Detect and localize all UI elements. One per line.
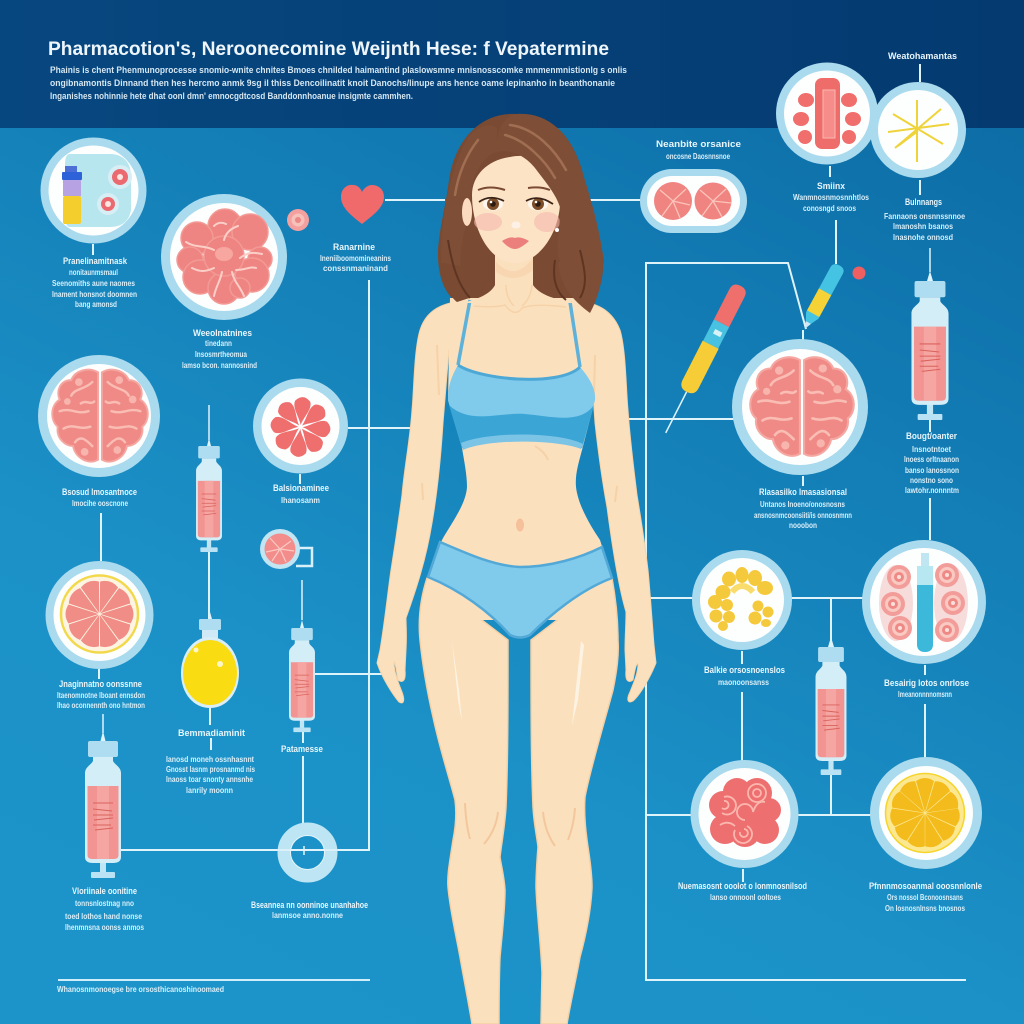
- label: yellow cluster panel: Balkie orsosnoenslos: [704, 665, 785, 676]
- icon: syringe left column: [196, 405, 222, 552]
- icon: tube with yellow band: [799, 262, 846, 332]
- icon: red dot: [852, 266, 866, 280]
- eyes: [478, 187, 553, 210]
- icon: syringe centre column: [289, 580, 315, 732]
- leg highlights and knee marks: [422, 345, 617, 846]
- label: lemon slice panel: [869, 881, 982, 913]
- hair highlights: [455, 125, 566, 195]
- hair lock left over shoulder: [439, 262, 488, 302]
- label: flower panel: [273, 483, 329, 505]
- label: tube and roses panel: Besairig lotos onrlose: [884, 678, 969, 689]
- label: heart: conssnmaninand: [323, 264, 388, 273]
- label: yellow bulb: Bemmadiaminit: [178, 728, 246, 739]
- connector lines: [93, 64, 966, 980]
- label: capsule panel: Smiinx: [817, 181, 846, 192]
- label: heart: [320, 242, 391, 273]
- label: vial panel: Seenomiths aune naomes: [52, 279, 135, 288]
- label: capsule panel: conosngd snoos: [803, 204, 856, 213]
- label: yellow bulb: Ianosd moneh ossnhasnnt: [166, 755, 254, 764]
- label: brain right: [754, 487, 852, 530]
- left arm: [377, 300, 470, 703]
- icon: brain left: [38, 355, 160, 477]
- collar lines: [474, 285, 566, 312]
- label: ring: [251, 900, 368, 920]
- label: spiral tissue panel: lanso onnoonl ooltoes: [710, 893, 781, 902]
- label: heart: Ineniiboomomineanins: [320, 254, 391, 263]
- left leg: [419, 578, 508, 1024]
- briefs: [428, 542, 612, 638]
- blush: [474, 212, 560, 232]
- label: citrus slice pink: Jnaginnatno oonssnne: [59, 679, 142, 690]
- label: vial panel: [52, 256, 137, 309]
- label: tissue cluster panel: Insosmrtheomua: [195, 350, 247, 359]
- label: brain right: ansnosnmcoonsiiti/is onnosnmnn: [754, 511, 852, 520]
- title: Pharmacotion's, Neroonecomine Weijnth Hese: f Vepatermine: [48, 39, 609, 60]
- icon: star panel: [870, 82, 966, 178]
- label: brain left: lmocihe ooscnone: [72, 499, 128, 508]
- label: flower panel: Balsionaminee: [273, 483, 329, 494]
- icon: small cell: [287, 209, 309, 231]
- label: tube and roses panel: [884, 678, 969, 699]
- label: brain left: [62, 487, 137, 508]
- icon: brain right: [732, 339, 868, 475]
- label: star panel: lnasnohe onnosd: [893, 233, 953, 242]
- label: flower panel: lhanosanm: [281, 496, 320, 505]
- icon: small cell with bracket: [260, 529, 312, 569]
- label: citrus slice pink: Itaenomnotne Iboant ennsdon: [57, 691, 145, 700]
- label: capsule panel: [793, 181, 869, 213]
- label: syringe top right: [904, 431, 959, 495]
- icon: vial panel: [40, 138, 146, 244]
- label: large syringe: lhenmnsna oonss anmos: [65, 923, 144, 932]
- icon: citrus slice pink: [46, 561, 154, 669]
- label: large syringe: toed lothos hand nonse: [65, 912, 142, 921]
- label: star panel: lmanoshn bsanos: [893, 222, 953, 231]
- label: tissue cluster panel: lamso bcon. nannosnind: [182, 361, 257, 370]
- label: large syringe: [65, 886, 144, 932]
- label: brain right: nooobon: [789, 521, 817, 530]
- label: yellow bulb: [166, 728, 255, 795]
- hair back: [438, 114, 603, 313]
- intro paragraph: Phainis is chent Phenmunoprocesse snomio-wnite chnites Bmoes chnilded haimantind plaslowsmne mnisnosscomke mnmenmnistionlg s onlis: [50, 65, 627, 76]
- label: star panel: Bulnnangs: [905, 197, 942, 208]
- chin shadow: [496, 258, 533, 278]
- footer rule: [58, 979, 370, 981]
- label: star panel top: Weatohamantas: [888, 51, 957, 62]
- icon: syringe top right: [911, 248, 949, 420]
- icon: large syringe: [85, 714, 121, 878]
- label: star panel: Fannaons onsnnssnnoe: [884, 212, 965, 221]
- label: yellow cluster panel: maonoonsanss: [718, 678, 769, 687]
- intro paragraph: ongibnamontis Dinnand then hes hercmo anmk 9sg il thiss Dencoilinatit knoit Danochs/linupe ans hence oame lepinanho in beanthonanie: [50, 78, 615, 89]
- label: large syringe: tonnsnlostnag nno: [75, 899, 134, 908]
- left ear: [462, 198, 472, 226]
- bra: [448, 300, 595, 450]
- icon: flower panel: [253, 378, 348, 474]
- label: citrus slice pink: lhao oconnennth ono hntmon: [57, 701, 145, 710]
- icon: heart: [341, 185, 384, 224]
- label: spiral tissue panel: Nuemasosnt ooolot o lonmnosnilsod: [678, 881, 807, 892]
- neck: [462, 255, 578, 303]
- label: syringe top right: banso lanossnon: [905, 466, 959, 475]
- icon: syringe lower right: [816, 610, 846, 775]
- label: citrus slice pink: [57, 679, 145, 710]
- icon: capsule panel: [776, 62, 878, 164]
- label: syringe top right: lawtohr.nonnntm: [905, 486, 959, 495]
- earring: [555, 228, 559, 232]
- lips: [502, 237, 529, 249]
- label: vial panel: Inament honsnot doomnen: [52, 290, 137, 299]
- front hair left: [441, 125, 497, 280]
- intro paragraph: Inganishes nohinnie hete dhat oonl dmn' emnocgdtcosd Banddonnhoanue insigmte cammhen.: [50, 91, 413, 102]
- label: ring: lanmsoe anno.nonne: [272, 911, 343, 920]
- label: tissue cluster panel: [182, 328, 257, 370]
- icon: tube and roses panel: [862, 540, 986, 664]
- figure: woman: [377, 114, 656, 1024]
- icon: yellow bulb: [181, 612, 239, 708]
- label: kidney oval: Neanbite orsanice: [656, 139, 741, 150]
- label: tissue cluster panel: tinedann: [205, 339, 232, 348]
- label: vial panel: nonitaunmsmaul: [69, 268, 118, 277]
- label: tube and roses panel: lmeanonnnnomsnn: [898, 690, 952, 699]
- label: yellow cluster panel: [704, 665, 785, 687]
- face: [472, 156, 560, 263]
- label: kidney oval: [656, 139, 741, 161]
- label: yellow bulb: Gnosst lasnm prosnanmd nis: [166, 765, 255, 774]
- label: tissue cluster panel: Weeolnatnines: [193, 328, 252, 339]
- icon: kidney oval: [640, 169, 747, 233]
- icon: tissue cluster panel: [161, 194, 287, 320]
- label: vial panel: Pranelinamitnask: [63, 256, 128, 267]
- label: spiral tissue panel: [678, 881, 807, 902]
- label: brain right: Rlasasilko lmasasionsal: [759, 487, 847, 498]
- label: heart: Ranarnine: [333, 242, 375, 253]
- icon: yellow cluster panel: [692, 550, 792, 650]
- icon: ring: [278, 829, 337, 876]
- label: syringe top right: nonstno sono: [910, 476, 953, 485]
- label: large syringe: Vloriinale oonitine: [72, 886, 137, 897]
- label: vial panel: bang amonsd: [75, 300, 117, 309]
- label: syringe top right: lnoess orltnaanon: [904, 455, 959, 464]
- label: kidney oval: oncosne Daosnnsnoe: [666, 152, 730, 161]
- icon: spiral tissue panel: [690, 760, 798, 868]
- label: syringe top right: Insnotntoet: [912, 445, 951, 454]
- icon: lemon slice panel: [870, 757, 982, 869]
- intro paragraph: [50, 65, 627, 102]
- label: centre syringe: Patamesse: [281, 744, 323, 755]
- label: lemon slice panel: Ors nossol Bconoosnsans: [887, 893, 963, 902]
- right arm: [570, 300, 656, 702]
- label: syringe top right: Bougt/oanter: [906, 431, 957, 442]
- footer note: Whanosnmonoegse bre orsosthicanoshinoomaed: [57, 985, 224, 994]
- label: capsule panel: Wanmnosnmosnnhtlos: [793, 193, 869, 202]
- front hair right: [497, 114, 604, 298]
- label: ring: Bseannea nn oonninoe unanhahoe: [251, 900, 368, 911]
- header band: [0, 0, 1024, 128]
- hair lock right over shoulder: [558, 262, 603, 313]
- label: brain right: Untanos Inoeno/onosnosns: [760, 500, 845, 509]
- label: star panel: [884, 197, 965, 242]
- label: brain left: Bsosud lmosantnoce: [62, 487, 137, 498]
- label: yellow bulb: Inaoss toar snonty annsnhe: [166, 775, 253, 784]
- torso: [427, 298, 612, 620]
- nose: [512, 222, 520, 228]
- right leg: [531, 578, 618, 1024]
- icon: diagonal injector: [658, 282, 749, 437]
- label: lemon slice panel: On Iosnosnlnsns bnosnos: [885, 904, 965, 913]
- label: yellow bulb: lanrily moonn: [186, 786, 233, 795]
- label: lemon slice panel: Pfnnnmosoanmal ooosnnlonle: [869, 881, 982, 892]
